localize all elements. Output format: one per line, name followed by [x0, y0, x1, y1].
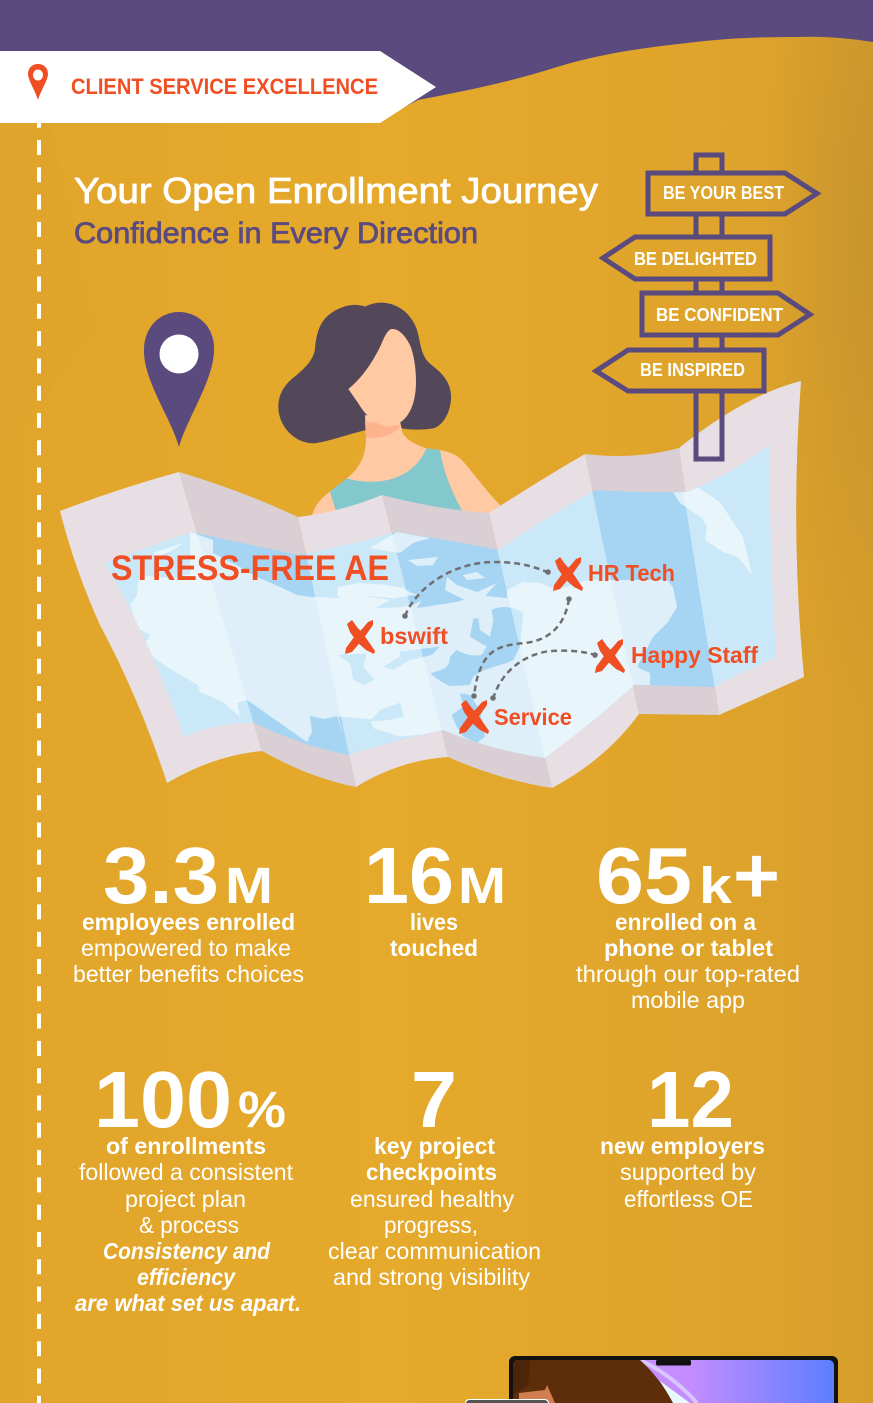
marker: HR Tech: HR Tech	[588, 560, 675, 586]
stat: 16M lives touched: lives	[410, 909, 458, 935]
stat: 100% of enrollments: %	[238, 1081, 286, 1138]
stat: 3.3M employees enrolled: employees enrolled	[82, 909, 295, 935]
icon: banner location pin	[28, 64, 48, 100]
stat: 12 new employers: 12	[647, 1055, 734, 1144]
laptop screen	[513, 1360, 834, 1403]
stat: 3.3M employees enrolled: 3.3	[103, 831, 219, 920]
stat: 12 new employers: supported by	[620, 1159, 757, 1185]
stat: 65k+ mobile enrollments	[576, 831, 800, 1013]
face	[348, 329, 416, 427]
icon: large location pin	[144, 312, 214, 447]
stat: 3.3M employees enrolled: better benefits choices	[73, 961, 304, 987]
sign: be delighted: BE DELIGHTED	[634, 249, 757, 269]
stat: 7 key project checkpoints: clear communication	[328, 1238, 541, 1264]
stat: 100% of enrollments: of enrollments	[106, 1133, 266, 1159]
stat: 65k+ mobile enrollments: mobile app	[631, 987, 745, 1013]
stat: 7 key project checkpoints: checkpoints	[366, 1159, 497, 1185]
sign: be inspired: BE INSPIRED	[640, 360, 745, 380]
marker: Service: Service	[494, 704, 572, 730]
stat: 100% of enrollments: are what set us apart.	[75, 1290, 301, 1316]
land masses	[129, 487, 752, 770]
stat: 100% of enrollments: project plan	[125, 1186, 246, 1212]
stat: 100% of enrollments: followed a consistent	[79, 1159, 294, 1185]
sign: be your best	[648, 173, 817, 214]
main heading: Your Open Enrollment Journey	[74, 170, 598, 211]
stat: 16M lives touched: M	[458, 857, 506, 914]
stat: 7 key project checkpoints: progress,	[384, 1212, 478, 1238]
stat: 100% of enrollments: 100	[94, 1055, 232, 1144]
post	[696, 155, 722, 459]
stat: 65k+ mobile enrollments: through our top-rated	[576, 961, 800, 987]
dashed journey line	[37, 113, 41, 1403]
header wave	[0, 0, 873, 120]
stat: 7 key project checkpoints	[328, 1055, 541, 1290]
folded map	[60, 381, 804, 790]
marker: Happy Staff: Happy Staff	[631, 642, 758, 668]
marker: Happy Staff	[595, 639, 758, 673]
stat: 12 new employers: new employers	[600, 1133, 765, 1159]
neck and shoulders	[312, 415, 500, 517]
subheading: Confidence in Every Direction	[74, 217, 478, 250]
seas and lakes	[337, 595, 523, 760]
stat: 12 new employers: effortless OE	[624, 1186, 753, 1212]
marker: bswift: bswift	[380, 623, 448, 649]
sign: be inspired	[596, 350, 764, 391]
teal top	[330, 448, 463, 513]
route: Service to Happy Staff	[493, 651, 595, 699]
route: HR Tech to Service	[474, 599, 569, 697]
stat: 65k+ mobile enrollments: k	[699, 857, 733, 914]
stat: 16M lives touched	[364, 831, 506, 961]
stat: 65k+ mobile enrollments: +	[733, 831, 780, 920]
marker: HR Tech	[553, 557, 675, 591]
stat: 100% of enrollments: Consistency and	[103, 1238, 271, 1264]
lighter alternate folds	[105, 445, 776, 758]
woman illustration	[278, 303, 500, 517]
laptop notch	[656, 1360, 691, 1366]
stat: 7 key project checkpoints: 7	[411, 1055, 457, 1144]
sign: be delighted	[603, 237, 770, 279]
map heading: STRESS-FREE AE	[111, 549, 389, 588]
marker: Service	[459, 700, 572, 734]
stat: 16M lives touched: touched	[390, 935, 478, 961]
title	[74, 170, 598, 250]
stat: 100% of enrollments: efficiency	[137, 1264, 236, 1290]
route end dots	[402, 569, 598, 701]
phone	[465, 1399, 549, 1403]
section banner	[0, 51, 436, 123]
stat: 65k+ mobile enrollments: 65	[596, 831, 692, 920]
map world surface	[105, 445, 776, 758]
sign: be confident	[642, 293, 810, 335]
signpost	[596, 155, 817, 459]
map paper panels	[60, 381, 804, 788]
stat: 100% of enrollments	[75, 1055, 301, 1316]
stat: 7 key project checkpoints: and strong visibility	[333, 1264, 531, 1290]
laptop	[509, 1356, 838, 1403]
banner heading: CLIENT SERVICE EXCELLENCE	[71, 74, 378, 99]
stat: 100% of enrollments: & process	[139, 1212, 239, 1238]
sign: be your best: BE YOUR BEST	[663, 183, 784, 203]
stat: 7 key project checkpoints: ensured healthy	[350, 1186, 514, 1212]
stat: 16M lives touched: 16	[364, 831, 454, 920]
stat: 12 new employers	[600, 1055, 765, 1212]
stat: 7 key project checkpoints: key project	[374, 1133, 495, 1159]
route: bswift to HR Tech	[405, 562, 547, 616]
sign: be confident: BE CONFIDENT	[656, 305, 783, 325]
stat: 3.3M employees enrolled: M	[225, 857, 273, 914]
stat: 3.3M employees enrolled: empowered to make	[81, 935, 291, 961]
stat: 65k+ mobile enrollments: enrolled on a	[615, 909, 756, 935]
hair	[278, 303, 451, 443]
stat: 3.3M employees enrolled	[73, 831, 304, 987]
marker: bswift	[345, 620, 448, 654]
neck shadow	[365, 422, 401, 438]
stat: 65k+ mobile enrollments: phone or tablet	[604, 935, 773, 961]
